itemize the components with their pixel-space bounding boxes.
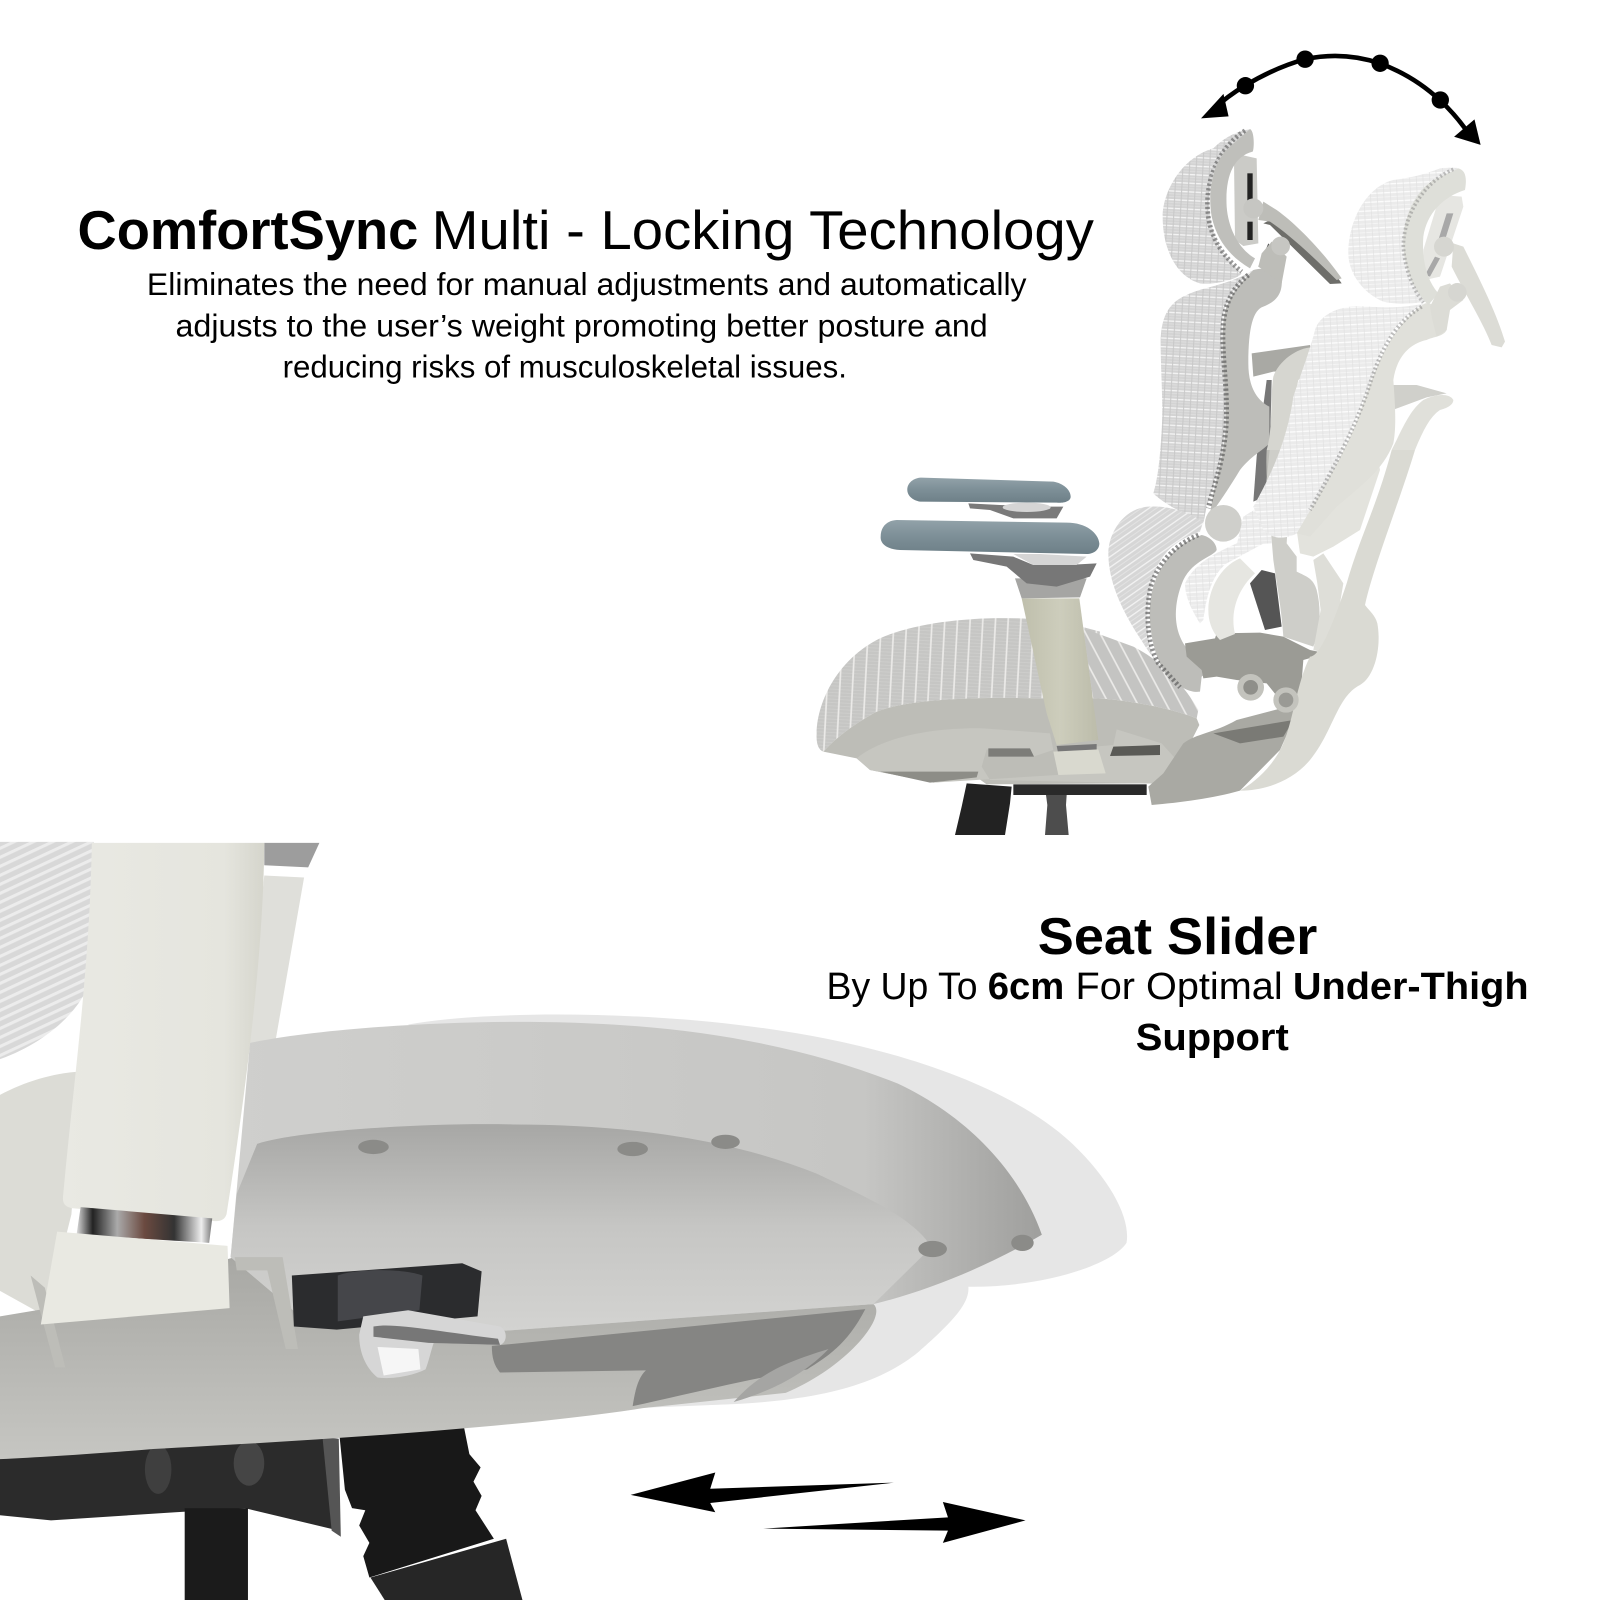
shell slats [1213, 720, 1293, 743]
ghost frame lower [1297, 450, 1380, 557]
description text: Seat Slider: For Optimal [1076, 965, 1283, 1007]
arm post [1022, 598, 1098, 745]
ghost interior ribs [1313, 553, 1343, 653]
ghost back stitched edge [1310, 307, 1422, 510]
lower seat shell [0, 1257, 876, 1459]
chrome lever [359, 1310, 506, 1378]
seat pan [823, 698, 1199, 784]
seat underside recess [231, 1124, 932, 1331]
ghost back lower mesh [1237, 500, 1272, 545]
seat pan slots [880, 745, 1160, 783]
rear armrest [907, 478, 1071, 518]
headrest bracket [1234, 155, 1258, 246]
seat pan lower face [857, 728, 1177, 783]
post base cap [41, 1232, 230, 1324]
arm post chrome strip [1057, 744, 1097, 754]
arm post [63, 843, 264, 1221]
ghost back frame [1297, 303, 1447, 537]
description text: Seat Slider: Under-Thigh [1293, 965, 1529, 1007]
arm post lower cap [1053, 749, 1106, 775]
ghost chair: reclined back [1185, 168, 1505, 791]
ghost spine upper [1267, 347, 1314, 450]
description text: Seat Slider: Support [1136, 1016, 1289, 1058]
ghost headrest stitched edge [1403, 169, 1453, 303]
bracket flanges [31, 1257, 298, 1367]
ghost shadow on recess [734, 1349, 829, 1402]
ghost lumbar mesh [1185, 540, 1270, 623]
lumbar ball joint [1205, 505, 1242, 542]
recline pivot knobs [1237, 674, 1299, 713]
description text: ComfortSync [147, 266, 1027, 385]
description text: Seat Slider: 6cm [988, 965, 1064, 1007]
dark mechanism under seat [0, 1423, 341, 1537]
chrome cylinder [77, 1207, 212, 1243]
lower column sleeve [370, 1539, 522, 1600]
ghost outer spine [1392, 395, 1453, 450]
rear lumbar bar [1252, 345, 1313, 377]
lumbar mesh [1108, 506, 1203, 688]
front armrest [881, 520, 1099, 587]
description text: ComfortSync: reducing risks of musculoskeletal issues. [283, 349, 847, 385]
dark recess under seat [492, 1309, 865, 1406]
seat mesh left [817, 618, 1100, 752]
headrest frame [1210, 129, 1255, 268]
description text: Seat Slider: By Up To [827, 965, 978, 1007]
back mesh stitched edge [1208, 275, 1248, 508]
gas lift pillar [185, 1508, 248, 1600]
headrest stitched edge [1207, 131, 1245, 272]
seat slider latch [292, 1263, 482, 1330]
dark interior [1250, 570, 1282, 630]
ghost back mesh [1253, 303, 1425, 538]
ghost headrest bracket [1423, 195, 1463, 280]
ghost spine lower [1266, 450, 1320, 647]
title: ComfortSync Multi-Locking Technology: ComfortSync [78, 199, 418, 261]
title: ComfortSync Multi-Locking Technology [78, 199, 1094, 261]
ribbed spring cover [339, 1418, 494, 1578]
backrest panel behind post [245, 843, 319, 1051]
title: ComfortSync Multi-Locking Technology: Multi - Locking Technology [432, 199, 1094, 261]
ghost headrest frame [1403, 168, 1466, 305]
headrest tilt arm [1243, 198, 1342, 284]
back mesh [1153, 270, 1253, 523]
headrest mesh [1163, 129, 1250, 284]
ghost lumbar frame [1208, 558, 1255, 640]
ghost seat pan: slid forward position [408, 1015, 1127, 1408]
lumbar stitched edge [1148, 535, 1198, 687]
ghost tilt arm [1430, 237, 1505, 347]
lumbar frame [1150, 535, 1217, 692]
ghost headrest mesh [1348, 168, 1458, 304]
mounting holes [358, 1135, 1034, 1257]
chair illustration: side view with reclining back [817, 129, 1505, 835]
mesh behind arm post [0, 842, 94, 1059]
ghost shell [1240, 450, 1415, 791]
chair base column [955, 783, 1147, 835]
lower shell [1148, 703, 1300, 805]
seat close-up photo illustration [0, 842, 1127, 1600]
heading: Seat Slider: Seat Slider [1038, 908, 1317, 966]
arrow: slide forward [763, 1502, 1026, 1543]
description text: ComfortSync: Eliminates the need for manual adjustments and automatically [147, 266, 1027, 302]
arrow: slide backward [631, 1472, 894, 1512]
recline mechanism body [1185, 633, 1327, 717]
curved double arrow: recline motion [1201, 51, 1481, 145]
main seat pan [231, 1022, 1042, 1331]
left seat edge [0, 1071, 82, 1316]
seat mesh right [1083, 628, 1198, 718]
arm height chrome ring [1015, 578, 1087, 598]
description text: ComfortSync: adjusts to the user’s weight promoting better posture and [176, 308, 988, 344]
dark spine slot [1253, 380, 1272, 502]
back frame [1210, 269, 1282, 515]
description text: Seat Slider [827, 965, 1529, 1058]
ghost rear bar [1388, 385, 1447, 412]
